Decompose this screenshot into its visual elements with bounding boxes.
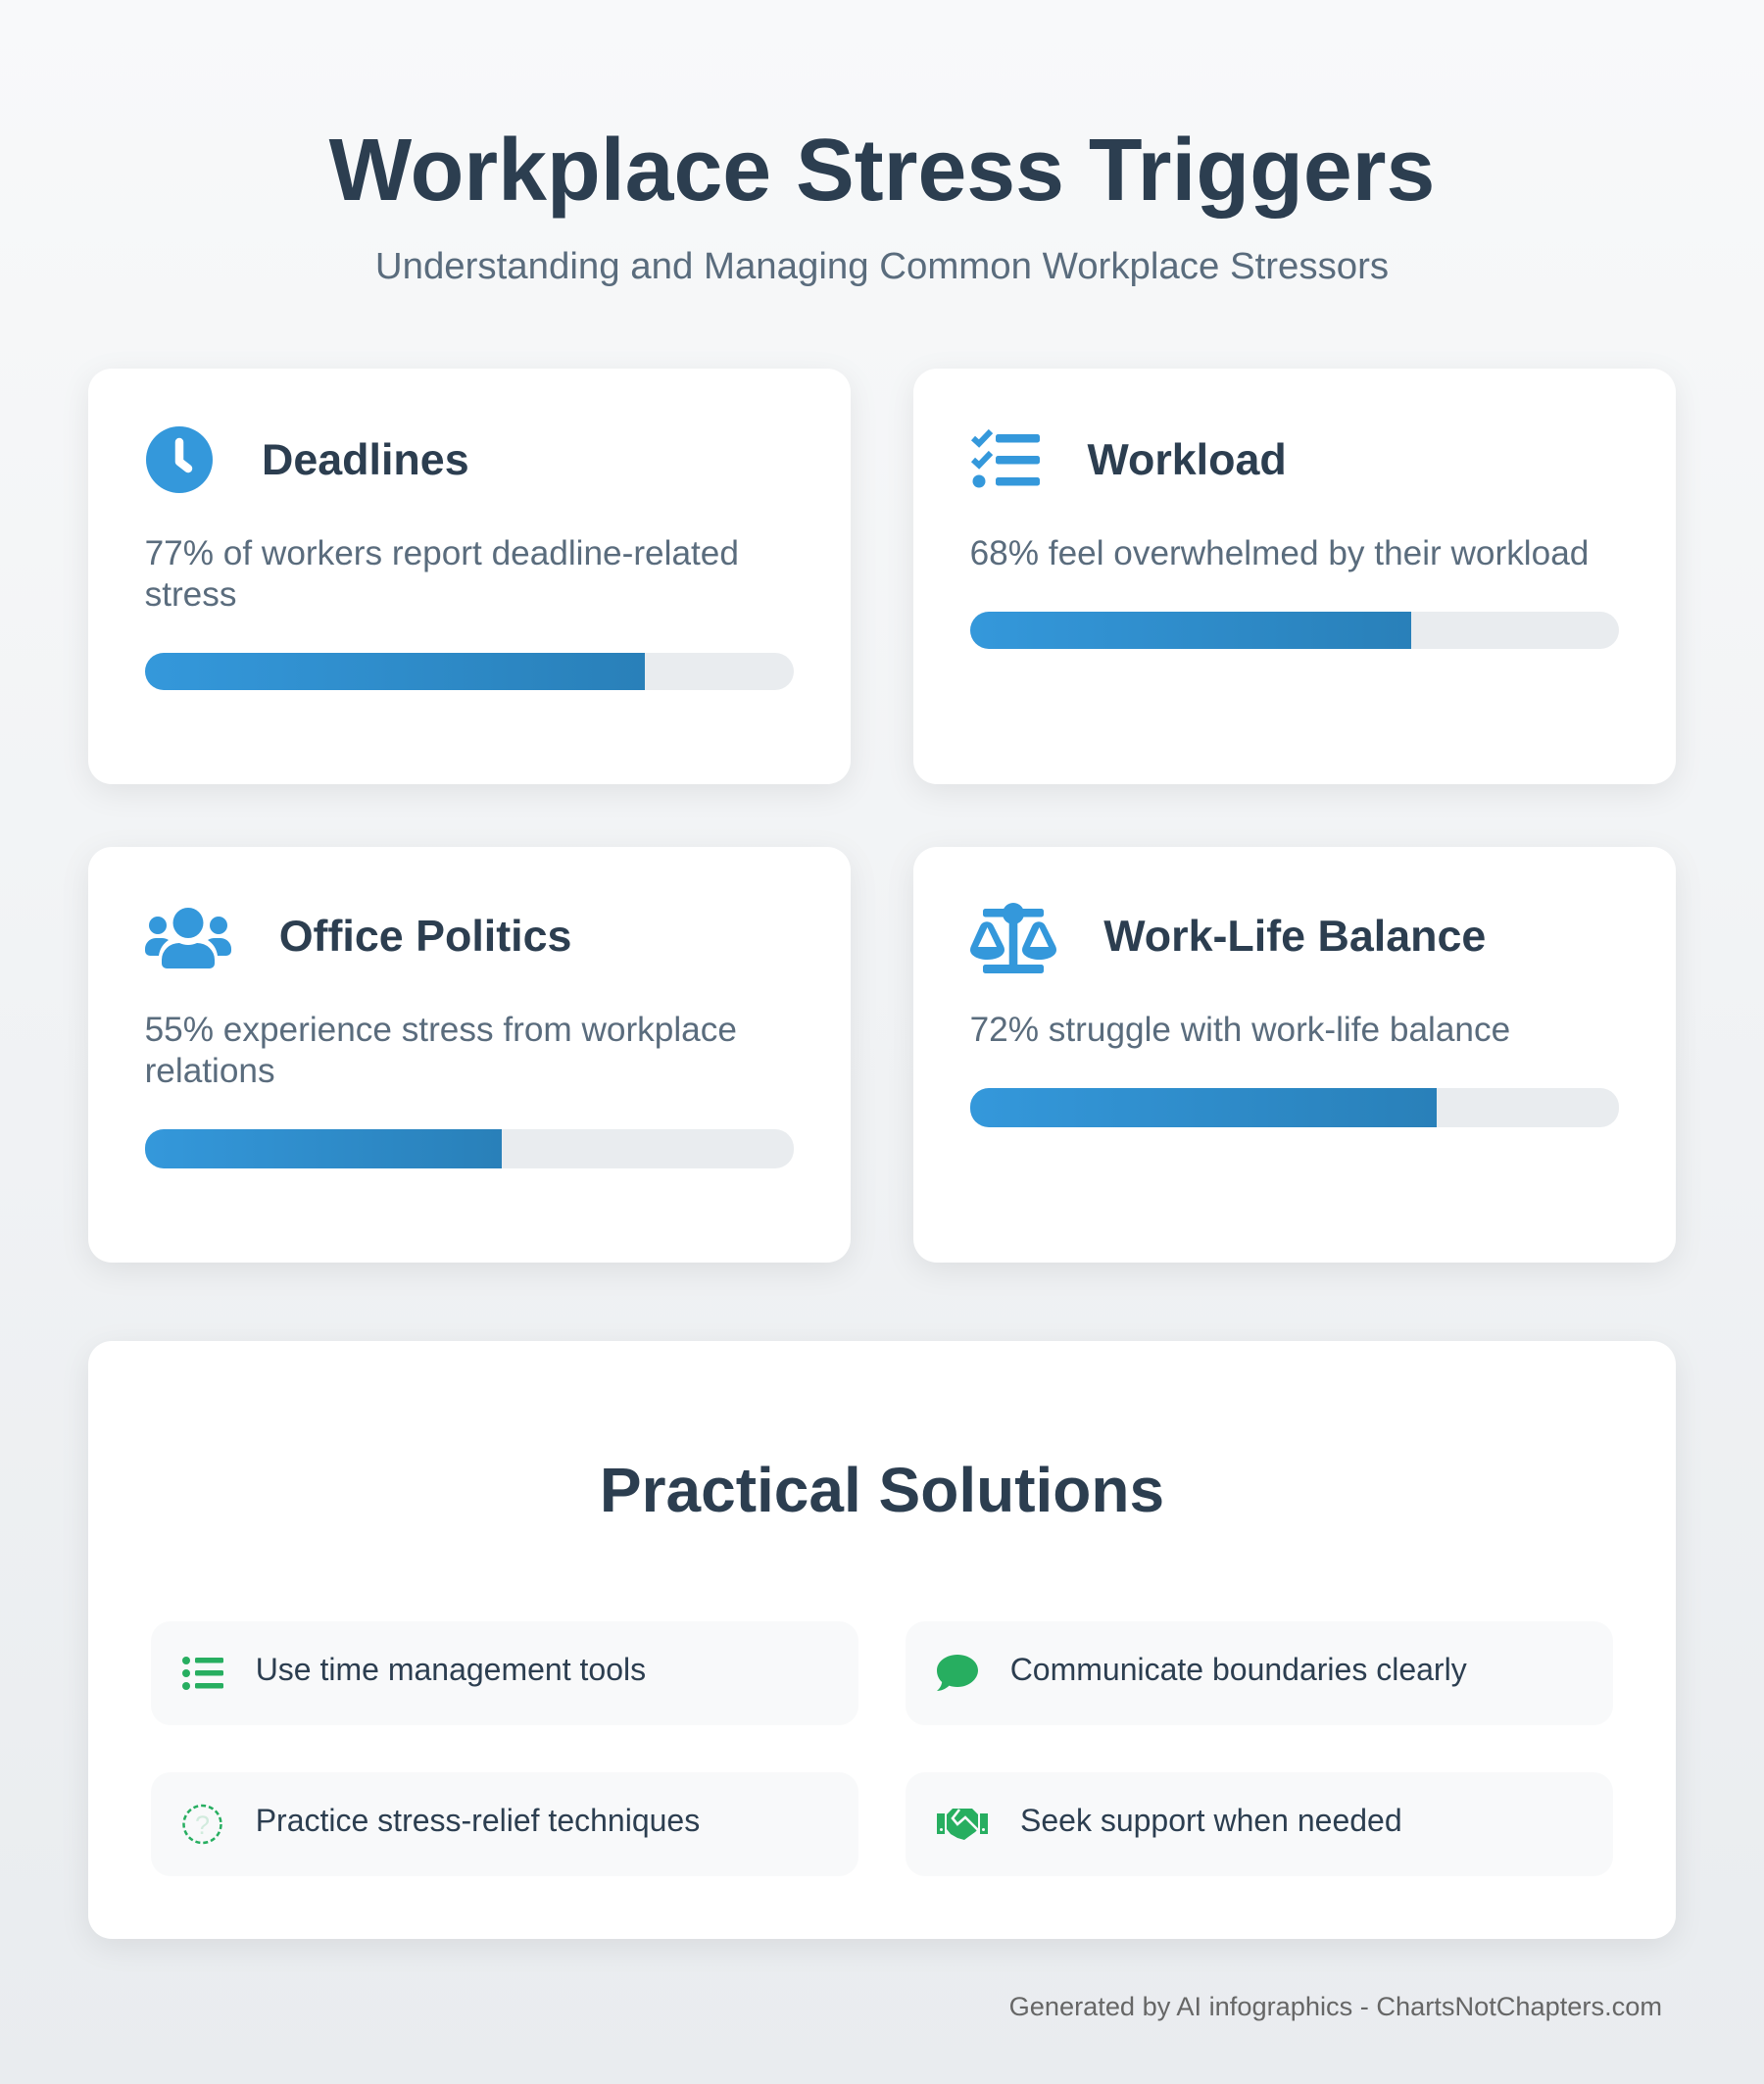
title: Workplace Stress Triggers (329, 120, 1435, 218)
progress bar: 77% (145, 653, 794, 690)
subtitle: Understanding and Managing Common Workplace Stressors (375, 245, 1389, 287)
icon: balance scale (970, 903, 1056, 973)
text: boundaries: Communicate boundaries clearly (1010, 1652, 1467, 1687)
panel: work-life balance (913, 847, 1676, 1263)
icon: dashed circle with question mark: ? (195, 1811, 210, 1840)
text: stress relief: Practice stress-relief techniques (256, 1803, 700, 1838)
footer attribution: Generated by AI infographics - ChartsNotChapters.com (1009, 1991, 1662, 2021)
icon: chat bubble (937, 1655, 978, 1691)
text: deadlines statistic: 77% of workers report deadline-related stress (145, 534, 739, 614)
icon: list (182, 1657, 223, 1690)
icon: handshake (937, 1809, 988, 1840)
heading: workload: Workload (1088, 435, 1287, 484)
panel: office politics (88, 847, 851, 1263)
heading: office politics: Office Politics (279, 912, 571, 961)
text: work-life balance statistic: 72% struggle with work-life balance (970, 1011, 1510, 1049)
solution: time management (151, 1621, 858, 1725)
solution: seek support (906, 1772, 1613, 1876)
icon: clock (146, 426, 213, 493)
panel: deadlines (88, 369, 851, 784)
icon: task list (971, 429, 1040, 488)
text: workload statistic: 68% feel overwhelmed by their workload (970, 534, 1589, 572)
heading: deadlines: Deadlines (262, 435, 469, 484)
text: office politics statistic: 55% experience stress from workplace relations (145, 1011, 737, 1090)
progress bar: 68% (970, 612, 1619, 649)
text: seek support: Seek support when needed (1020, 1803, 1402, 1838)
progress bar: 72% (970, 1088, 1619, 1127)
icon: users (145, 908, 231, 968)
panel: workload (913, 369, 1676, 784)
icon: dashed circle with question mark (182, 1804, 222, 1845)
solution: boundaries (906, 1621, 1613, 1725)
solution: stress relief (151, 1772, 858, 1876)
heading: work-life balance: Work-Life Balance (1103, 912, 1486, 961)
heading: practical solutions: Practical Solutions (600, 1455, 1164, 1525)
progress bar: 55% (145, 1129, 794, 1168)
text: time management: Use time management tools (256, 1652, 646, 1687)
panel: practical solutions (88, 1341, 1676, 1939)
